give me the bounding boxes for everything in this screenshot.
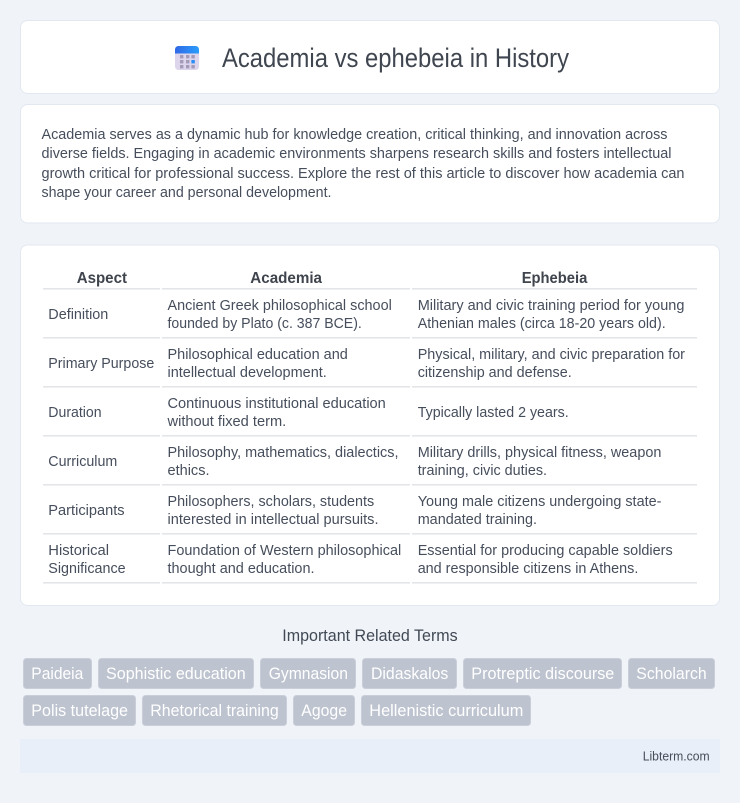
row: Primary Purpose: Philosophical education and <box>168 347 348 363</box>
row: Participants: Young male citizens undergoing state- <box>418 494 662 510</box>
row: Duration <box>43 396 697 437</box>
intro paragraph: shape your career and personal development. <box>42 185 332 201</box>
row: Definition: Definition <box>48 307 108 323</box>
row: Historical Significance: Foundation of Western philosophical <box>168 543 401 559</box>
table header row: Aspect <box>77 270 128 287</box>
footer credit: Libterm.com <box>643 748 710 763</box>
row: Primary Purpose: Primary Purpose <box>48 356 154 372</box>
tag: Rhetorical training: Rhetorical training <box>150 702 279 720</box>
tag: Sophistic education: Sophistic education <box>106 665 246 683</box>
tag: Scholarch: Scholarch <box>636 665 707 683</box>
row: Definition: Athenian males (circa 18-20 years old). <box>418 316 666 332</box>
intro paragraph <box>42 127 684 201</box>
row: Participants: Philosophers, scholars, students <box>168 494 374 510</box>
tag: Protreptic discourse: Protreptic discourse <box>471 665 614 683</box>
row: Duration: Continuous institutional education <box>168 396 386 412</box>
tag: Gymnasion <box>260 658 356 688</box>
row: Duration: without fixed term. <box>166 414 286 430</box>
row: Definition: Military and civic training period for young <box>418 298 684 314</box>
tag: Gymnasion: Gymnasion <box>269 665 348 683</box>
row: Participants: interested in intellectual pursuits. <box>168 512 378 528</box>
tag: Paideia: Paideia <box>31 665 84 683</box>
row: Historical Significance: Historical <box>48 543 109 559</box>
row: Historical Significance: thought and education. <box>168 561 314 577</box>
table header row: Academia <box>250 270 322 287</box>
row: Primary Purpose: intellectual development. <box>168 365 327 381</box>
row: Historical Significance: Significance <box>48 561 126 577</box>
table header row <box>43 270 697 290</box>
panel: header <box>20 20 720 94</box>
title: Academia vs ephebeia in History <box>222 43 570 73</box>
row: Duration: Typically lasted 2 years. <box>418 405 569 421</box>
row: Duration: Duration <box>48 405 102 421</box>
footer <box>20 739 720 773</box>
tag: Rhetorical training <box>142 696 286 726</box>
row: Participants: Participants <box>48 503 125 519</box>
row: Definition: founded by Plato (c. 387 BCE). <box>168 316 362 332</box>
intro paragraph: Academia serves as a dynamic hub for knowledge creation, critical thinking, and innovation across <box>42 127 668 143</box>
panel: comparison table <box>20 245 720 606</box>
tag: Agoge <box>294 696 354 726</box>
row: Curriculum <box>43 445 697 486</box>
row: Primary Purpose <box>43 347 697 388</box>
row: Participants: mandated training. <box>418 512 537 528</box>
row: Participants <box>43 494 697 535</box>
related term tags <box>24 658 714 726</box>
row: Curriculum: ethics. <box>168 463 210 479</box>
row: Definition <box>43 298 697 339</box>
tag: Didaskalos: Didaskalos <box>371 665 448 683</box>
row: Historical Significance: Essential for producing capable soldiers <box>418 543 673 559</box>
row: Curriculum: Philosophy, mathematics, dialectics, <box>168 445 398 461</box>
tag: Didaskalos <box>362 658 456 688</box>
tag: Protreptic discourse <box>464 658 622 688</box>
row: Historical Significance: and responsible citizens in Athens. <box>418 561 638 577</box>
icon: calendar <box>175 46 199 70</box>
panel: introduction <box>20 104 720 223</box>
tag: Paideia <box>24 658 92 688</box>
intro paragraph: growth critical for professional success. Explore the rest of this article to discover how academia can <box>42 166 684 182</box>
row: Definition: Ancient Greek philosophical school <box>168 298 392 314</box>
row: Curriculum: Curriculum <box>48 454 117 470</box>
tag: Polis tutelage <box>24 696 136 726</box>
tag: Hellenistic curriculum <box>362 696 530 726</box>
tag: Hellenistic curriculum: Hellenistic curriculum <box>369 702 523 720</box>
tag: Sophistic education <box>98 658 254 688</box>
row: Curriculum: training, civic duties. <box>418 463 547 479</box>
tag: Agoge: Agoge <box>301 702 347 720</box>
row: Historical Significance <box>43 543 697 584</box>
heading: related terms: Important Related Terms <box>282 627 458 645</box>
tag: Scholarch <box>628 658 714 688</box>
row: Primary Purpose: citizenship and defense. <box>418 365 572 381</box>
row: Primary Purpose: Physical, military, and civic preparation for <box>418 347 685 363</box>
tag: Polis tutelage: Polis tutelage <box>31 702 128 720</box>
row: Curriculum: Military drills, physical fitness, weapon <box>418 445 661 461</box>
intro paragraph: diverse fields. Engaging in academic environments sharpens research skills and fosters intellectual <box>42 146 672 162</box>
table header row: Ephebeia <box>522 270 587 287</box>
